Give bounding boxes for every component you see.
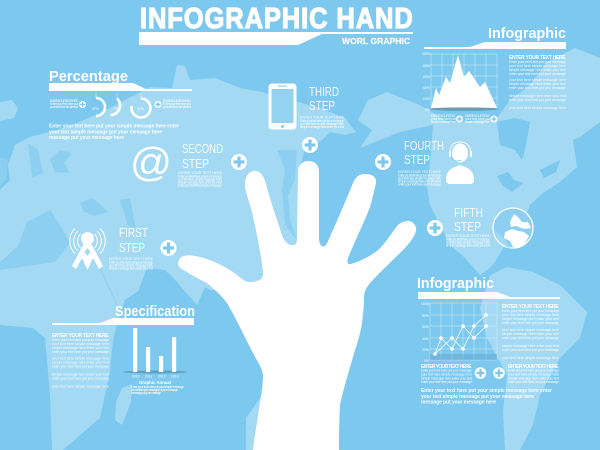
- text column: simple message here enter your text: [502, 344, 559, 348]
- heading bar: [418, 292, 560, 299]
- line chart: 100%: [421, 302, 430, 306]
- third step text: simple message here enter your text: [300, 125, 344, 129]
- third step text: STEP: [309, 99, 335, 113]
- heading bar: [49, 83, 192, 91]
- area chart: 80%: [423, 64, 430, 68]
- caption text right: your text here put: [465, 117, 490, 121]
- small text left: your text here simple text: [50, 105, 78, 109]
- plus icon: [490, 115, 498, 123]
- title: WORL GRAPHIC: [342, 36, 410, 46]
- text column: Enter your text here put your message: [509, 60, 566, 64]
- bar chart: 2013: [171, 374, 179, 378]
- icon: radio tower: [70, 228, 105, 270]
- line chart: 60%: [422, 325, 429, 329]
- text column: simple message here enter your text: [502, 332, 559, 336]
- second step text: STEP: [182, 157, 209, 171]
- heading bar: [424, 42, 566, 49]
- text column: simple message here enter your text: [509, 94, 566, 98]
- bar chart: 2010: [132, 374, 140, 378]
- fifth step text: your text here simple message here: [446, 240, 490, 244]
- text column: ENTER YOUR TEXT HERE: [509, 55, 566, 61]
- caption text right: your text here simple message here: [508, 372, 559, 376]
- fifth step text: ENTER YOUR TEXT HERE: [446, 234, 491, 238]
- gauge labels: 37%: [92, 107, 99, 111]
- bar chart: [123, 328, 187, 378]
- caption text left: [421, 364, 472, 384]
- fifth step text: Enter your text here put your message: [446, 238, 490, 242]
- paragraph: message put your message here: [49, 135, 124, 141]
- third step text: [300, 85, 345, 129]
- text column: [502, 304, 559, 360]
- bar chart: 2012: [158, 374, 166, 378]
- chart caption: [131, 380, 184, 395]
- caption text right: ENTER YOUR TEXT: [465, 114, 491, 118]
- icon: phone: [268, 84, 296, 130]
- donut gauges: [96, 93, 150, 118]
- plus icon: [427, 220, 443, 236]
- paragraph: your text simple message put your message here: [49, 130, 162, 136]
- text column: simple message here enter your text: [52, 360, 109, 364]
- caption text left: enter your text here put your message: [421, 380, 472, 384]
- line chart: 20%: [422, 348, 429, 352]
- area chart: 60%: [423, 75, 430, 79]
- area chart: 100%: [422, 52, 431, 56]
- heading: Specification: [115, 303, 195, 320]
- gauge labels: 75%: [113, 107, 120, 111]
- second step text: [178, 142, 223, 188]
- caption text left: ENTER YOUR TEXT: [431, 114, 457, 118]
- first step text: STEP: [119, 241, 145, 255]
- fourth step text: [398, 139, 444, 186]
- first step text: simple message here enter your text: [109, 266, 153, 270]
- title: INFOGRAPHIC HAND: [140, 1, 413, 34]
- second step text: SECOND: [182, 142, 223, 156]
- second step text: Enter your text here put your message: [178, 174, 222, 178]
- chart caption: Enter your text here put your simple message: [131, 385, 184, 389]
- panel: top right infographic: [422, 25, 566, 124]
- heading: percentage: Percentage: [49, 68, 128, 85]
- text column: your text here simple message here: [502, 356, 559, 360]
- paragraph: message put your message here: [421, 400, 496, 406]
- small text right: your text here simple text: [163, 105, 191, 109]
- text column: ENTER YOUR TEXT HERE: [52, 333, 109, 339]
- plus icon: [456, 115, 463, 123]
- caption text right: [508, 364, 559, 384]
- small text right: Enter your text here put: [163, 102, 191, 106]
- text column: your text here simple message here: [502, 328, 559, 332]
- caption text right: Enter your text here put your message: [508, 368, 559, 372]
- first step text: your text here simple message here: [109, 264, 153, 268]
- fourth step text: enter your text here put message: [398, 182, 441, 186]
- second step text: enter your text here put your message: [178, 184, 222, 188]
- caption text left: simple message here enter your text: [421, 376, 472, 380]
- line chart: 0%: [424, 359, 429, 363]
- text column: enter your text here put your message: [502, 321, 559, 325]
- fourth step text: Enter your text here put your message: [398, 174, 441, 178]
- text column: Enter your text here put your message: [52, 338, 109, 342]
- paragraph: Enter your text here put your simple message here enter: [421, 388, 552, 394]
- plus icon: [154, 101, 162, 108]
- text column: Enter your text here put your message: [502, 309, 559, 313]
- text column: your text here simple message here: [509, 64, 566, 68]
- text column: enter your text here put your message: [509, 72, 566, 76]
- small text left: [50, 99, 79, 109]
- first step text: ENTER YOUR TEXT HERE: [109, 257, 154, 261]
- caption text right: simple message here enter your text: [508, 376, 559, 380]
- text column: enter your text here put your message: [509, 98, 566, 102]
- heading: Infographic: [488, 25, 566, 42]
- text column: your text here simple message here: [52, 356, 109, 360]
- text column: your text here simple message here: [509, 78, 566, 82]
- second step text: ENTER YOUR TEXT HERE: [178, 171, 223, 175]
- text column: [52, 333, 109, 388]
- text column: enter your text here put your message: [52, 350, 109, 354]
- small text left: ENTER YOUR TEXT HERE: [50, 99, 79, 103]
- third step text: your text here simple message here: [300, 122, 344, 126]
- fifth step text: STEP: [454, 220, 481, 234]
- text column: simple message here enter your text: [509, 82, 566, 86]
- text column: enter your text here put your message: [52, 364, 109, 368]
- caption text left: [431, 114, 457, 124]
- text column: simple message here enter your text: [52, 372, 109, 376]
- first step text: FIRST: [119, 226, 148, 240]
- panel: specification: [52, 303, 195, 395]
- icon: headset person: [446, 142, 474, 184]
- second step text: your text here simple message here: [178, 178, 222, 182]
- panel: percentage: [49, 68, 192, 141]
- first step text: Enter your text here put your message: [109, 260, 153, 264]
- fifth step text: simple message here enter your text: [446, 244, 490, 248]
- area chart: 20%: [423, 97, 430, 101]
- text column: simple message here enter your text: [509, 68, 566, 72]
- text column: simple message here enter your text: [52, 346, 109, 350]
- text column: your text here simple message here: [509, 106, 566, 110]
- plus icon: [302, 137, 318, 153]
- icon: globe: [493, 208, 533, 248]
- caption text left: your text here simple message here: [421, 372, 472, 376]
- text column: simple message here enter your text: [502, 317, 559, 321]
- text column: enter your text here put your message: [52, 376, 109, 380]
- fourth step text: STEP: [404, 153, 430, 167]
- caption text right: enter your text here put your message: [508, 380, 559, 384]
- text column: enter your text here put your message: [509, 86, 566, 90]
- area chart: 0%: [425, 108, 430, 112]
- fifth step text: FIFTH: [454, 206, 483, 220]
- caption text left: Enter your text here put your message: [421, 368, 472, 372]
- chart caption: message put your message: [131, 391, 161, 395]
- chart caption: Graphic Annual: [139, 380, 171, 385]
- third step text: Enter your text here put your message: [300, 119, 344, 123]
- text column: [509, 55, 566, 110]
- plus icon: [79, 101, 86, 108]
- fourth step text: simple message here enter your text: [398, 180, 441, 184]
- plus icon: [231, 154, 247, 170]
- gauge labels: 92%: [137, 107, 144, 111]
- icon: at sign: @: [130, 139, 172, 185]
- text column: enter your text here put your message: [502, 348, 559, 352]
- plus icon: [493, 367, 505, 379]
- text column: your text here simple message here: [502, 313, 559, 317]
- line chart: 40%: [422, 337, 429, 341]
- plus icon: [475, 367, 486, 379]
- plus icon: [375, 154, 391, 170]
- paragraph: your text simple message put your message here: [421, 394, 534, 400]
- paragraph: [49, 124, 179, 141]
- paragraph: Enter your text here put your simple message here enter: [49, 124, 179, 130]
- caption text left: your text here put: [431, 117, 456, 121]
- hand: [178, 161, 416, 450]
- paragraph: [421, 388, 552, 406]
- text column: ENTER YOUR TEXT HERE: [502, 304, 559, 310]
- area chart: 40%: [423, 86, 430, 90]
- heading bar: [52, 318, 194, 325]
- third step text: THIRD: [309, 85, 339, 99]
- chart caption: your text simple message put your message: [131, 388, 178, 392]
- text column: enter your text here put your message: [502, 336, 559, 340]
- line chart: 80%: [422, 314, 429, 318]
- text column: your text here simple message here: [52, 384, 109, 388]
- caption text left: ENTER YOUR TEXT HERE: [421, 364, 472, 370]
- heading: Infographic: [417, 275, 494, 292]
- first step text: [109, 226, 154, 270]
- panel: lower right infographic: [417, 275, 560, 406]
- plus icon: [160, 240, 176, 256]
- fourth step text: FOURTH: [404, 139, 444, 153]
- caption text left: simple message here: [431, 120, 456, 124]
- bar chart: 2011: [145, 374, 152, 378]
- fourth step text: ENTER YOUR TEXT HERE: [398, 170, 442, 174]
- caption text right: ENTER YOUR TEXT HERE: [508, 364, 559, 370]
- small text right: ENTER YOUR TEXT HERE: [163, 99, 192, 103]
- area chart: [422, 52, 498, 112]
- caption text right: simple message here: [465, 120, 490, 124]
- fifth step text: [446, 206, 491, 248]
- small text left: Enter your text here put: [50, 102, 78, 106]
- caption text right: [465, 114, 491, 124]
- fourth step text: your text here simple message here: [398, 176, 441, 180]
- line chart: [421, 302, 497, 363]
- small text right: [163, 99, 192, 109]
- text column: your text here simple message here: [52, 342, 109, 346]
- third step text: ENTER YOUR TEXT HERE: [300, 116, 345, 120]
- second step text: simple message here enter your text: [178, 180, 222, 184]
- gauge labels: [92, 107, 144, 111]
